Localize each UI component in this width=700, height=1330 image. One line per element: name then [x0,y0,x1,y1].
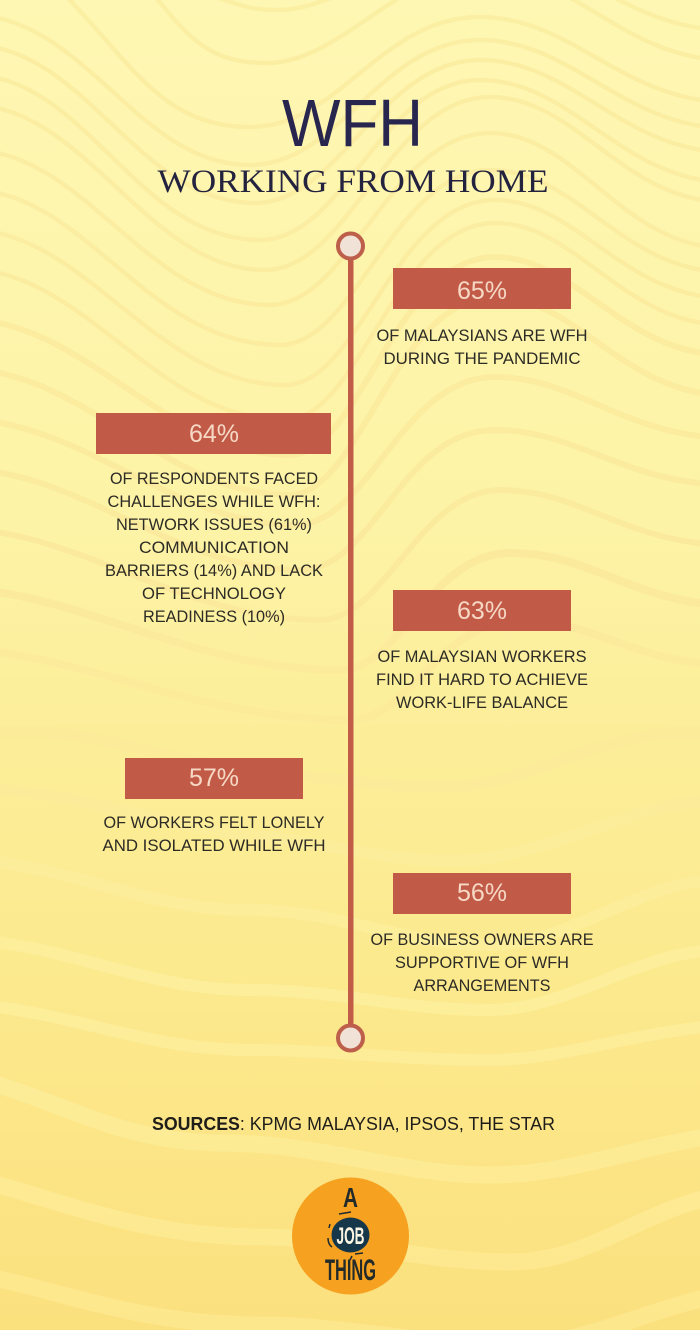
sources: SOURCES: KPMG MALAYSIA, IPSOS, THE STAR [152,1113,555,1134]
stat: 56%: SUPPORTIVE OF WFH [395,953,569,972]
stat: 63%: 63% [457,597,507,625]
stat: 63%: FIND IT HARD TO ACHIEVE [376,670,588,689]
stat: 64%: COMMUNICATION [139,538,289,557]
stat: 64%: NETWORK ISSUES (61%) [116,515,312,534]
logo [292,1178,409,1294]
stat: 64%: READINESS (10%) [143,607,285,626]
stat: 56%: OF BUSINESS OWNERS ARE [370,930,594,949]
stat: 57% [102,758,326,855]
logo: A [343,1182,358,1213]
title: WFH [282,86,423,161]
timeline [338,234,363,1050]
stat: 65%: DURING THE PANDEMIC [384,349,580,368]
stat: 64%: OF TECHNOLOGY [142,584,286,603]
stat: 64%: 64% [189,420,239,448]
stat: 57%: AND ISOLATED WHILE WFH [102,836,326,855]
stat: 64%: BARRIERS (14%) AND LACK [105,561,324,580]
stat: 57%: 57% [189,764,239,792]
logo: THING [325,1254,376,1287]
stat: 65% [376,268,588,368]
stat: 64%: OF RESPONDENTS FACED [110,469,318,488]
stat: 63%: OF MALAYSIAN WORKERS [378,647,586,666]
stat: 56%: 56% [457,879,507,907]
stat: 56%: ARRANGEMENTS [414,976,550,995]
stat: 64% [96,413,331,626]
stat: 57%: OF WORKERS FELT LONELY [104,813,324,832]
stat: 56% [370,873,594,995]
stat: 63% [376,590,588,712]
stat: 65%: OF MALAYSIANS ARE WFH [376,326,588,345]
subtitle: WORKING FROM HOME [158,164,548,200]
logo: JOB [336,1223,364,1250]
stat: 65%: 65% [457,277,507,305]
stat: 63%: WORK-LIFE BALANCE [396,693,568,712]
stat: 64%: CHALLENGES WHILE WFH: [108,492,320,511]
